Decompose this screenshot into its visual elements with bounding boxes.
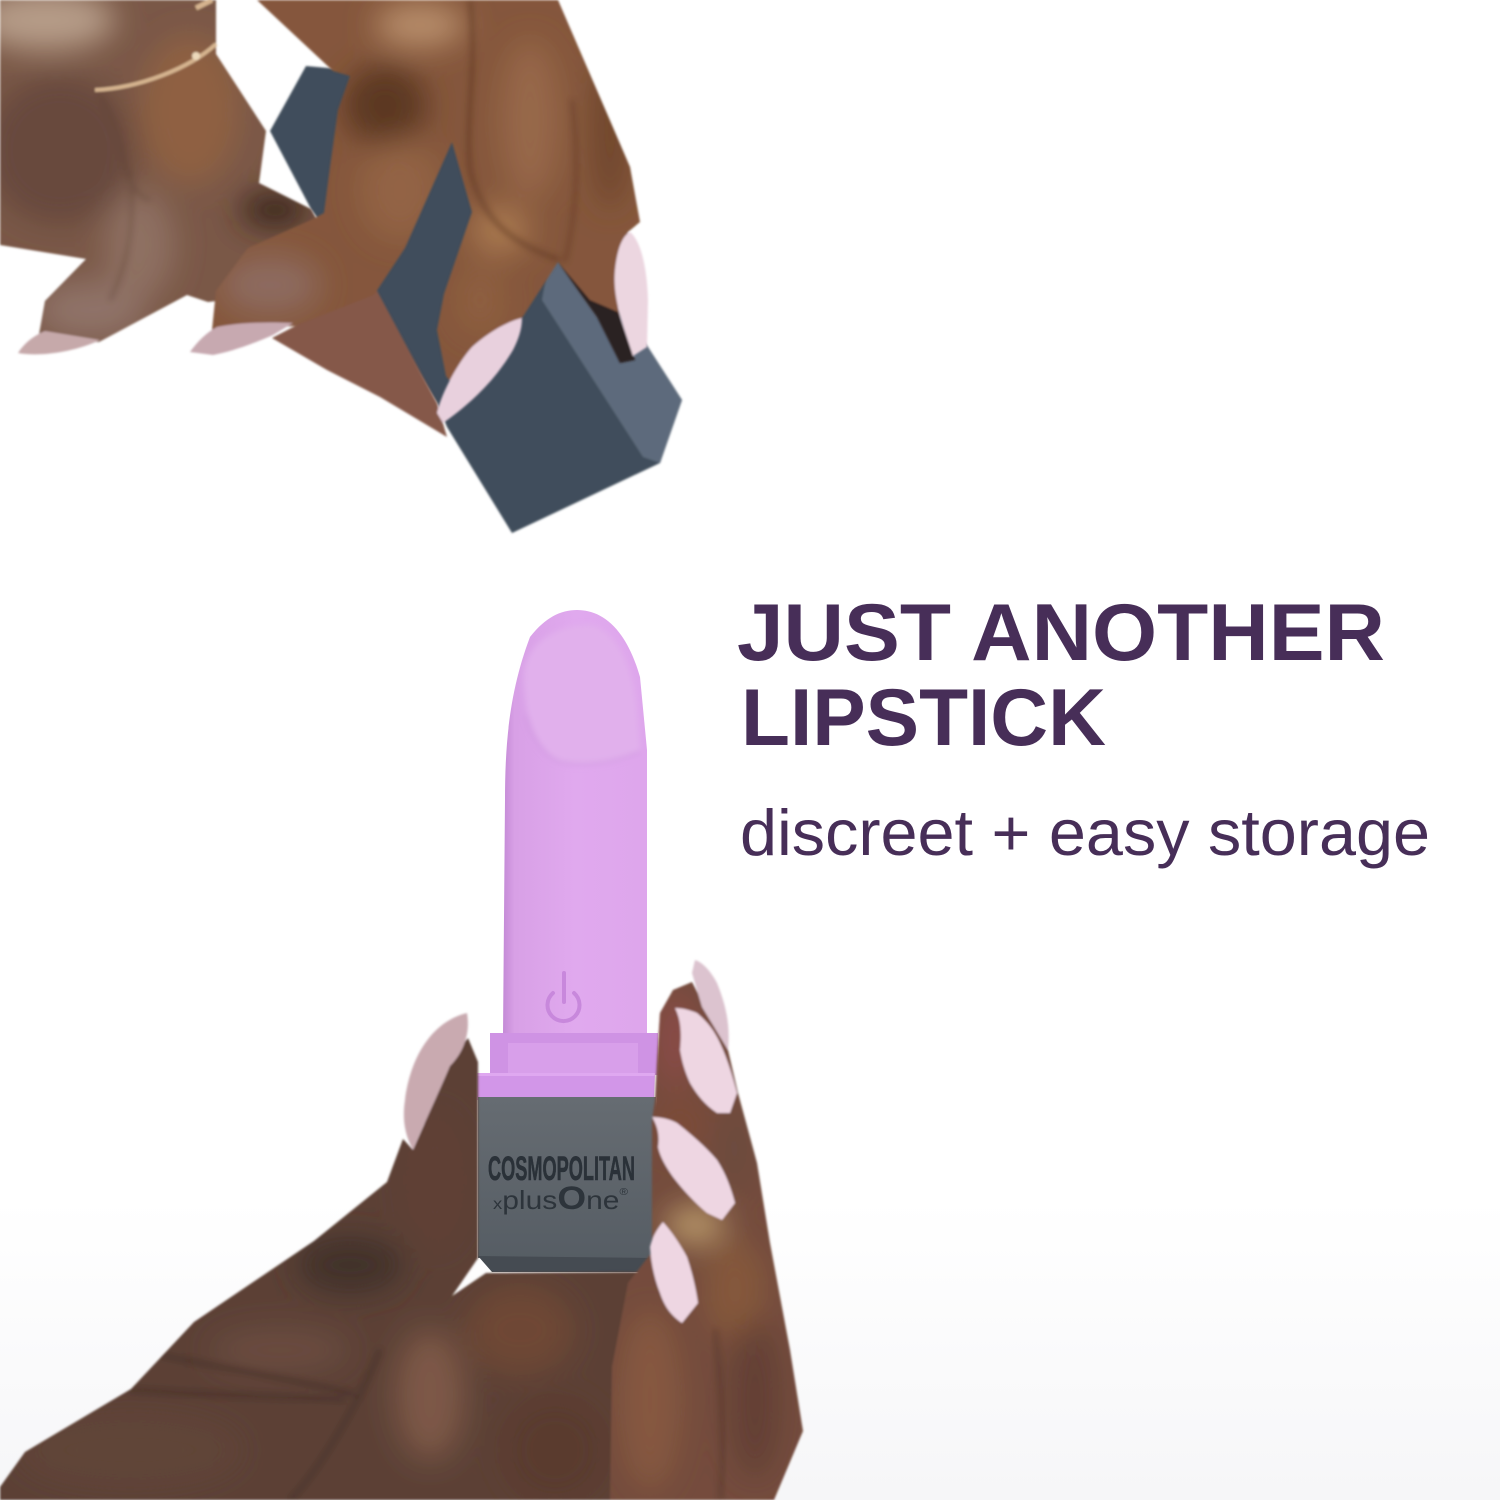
product text: ® <box>619 1187 629 1198</box>
left fingers <box>0 0 330 350</box>
fingernail: fourth finger <box>650 1222 698 1323</box>
fingernail: middle finger <box>437 318 522 423</box>
product text: xplusOne <box>493 1180 615 1216</box>
brand text: COSMOPOLITAN <box>488 1150 635 1188</box>
bottom hand <box>0 960 810 1500</box>
subheading: discreet + easy storage <box>740 796 1430 869</box>
finger shadow under nail <box>558 262 635 363</box>
heading: LIPSTICK <box>741 673 1106 763</box>
fingernail: index finger <box>190 322 293 355</box>
angled tip facet <box>524 625 640 764</box>
lipstick base <box>478 1097 656 1272</box>
lipstick cap <box>270 66 682 533</box>
finger ring <box>95 0 216 90</box>
right fingers <box>600 970 810 1500</box>
icon: power button <box>547 973 580 1021</box>
fingernail: thumb <box>404 1013 468 1150</box>
heading: JUST ANOTHER <box>737 588 1385 678</box>
fingernail: second finger <box>675 1008 737 1113</box>
main fingers <box>210 0 642 381</box>
fingernail: third finger <box>652 1117 735 1220</box>
palm and thumb <box>0 1037 638 1500</box>
fingernail: top finger <box>692 960 729 1050</box>
fingernail: ring finger <box>18 331 100 354</box>
lipstick body <box>503 610 647 1035</box>
top hand <box>0 0 660 437</box>
heading <box>737 588 1385 763</box>
lipstick collar <box>477 1033 658 1100</box>
lower palm strip <box>272 285 447 437</box>
fingernail: right finger <box>615 232 648 356</box>
